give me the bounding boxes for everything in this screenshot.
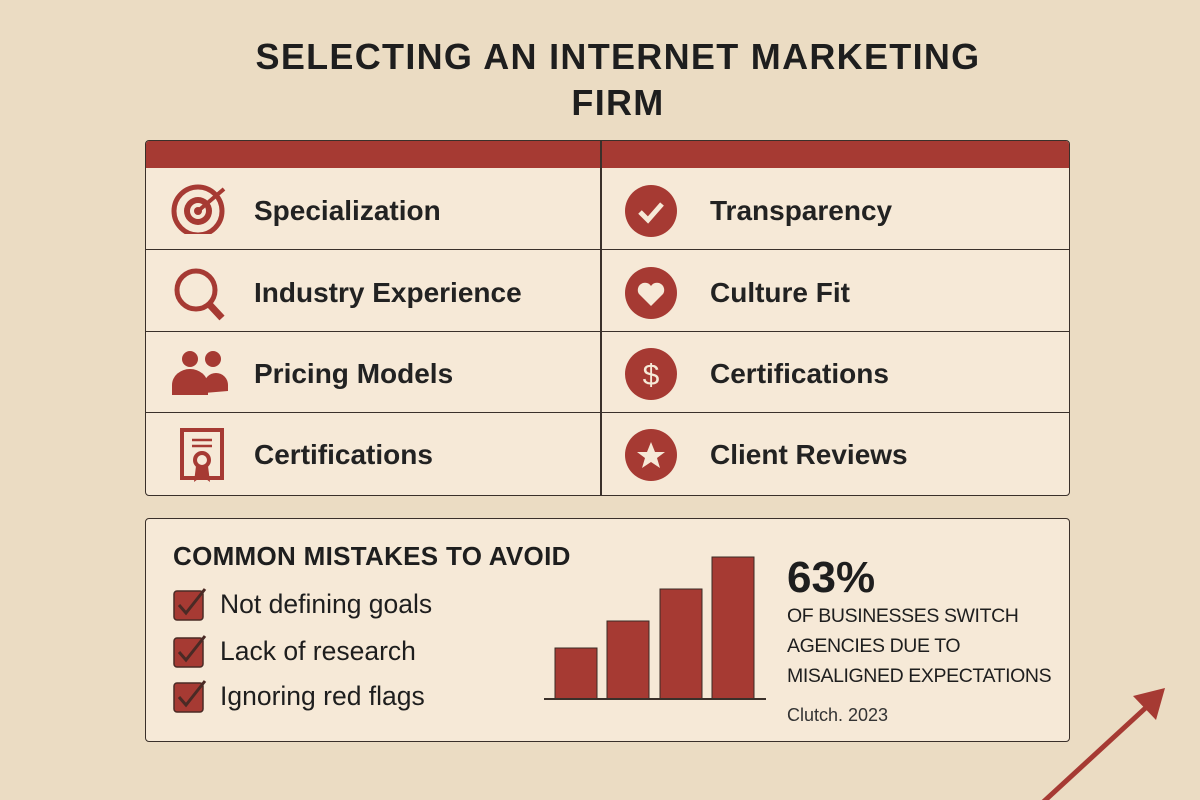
cell: Certifications (dollar) bbox=[602, 331, 1069, 413]
panel: common mistakes and stat: Lack of research bbox=[220, 636, 416, 666]
title: FIRM bbox=[571, 82, 665, 123]
stat description: OF BUSINESSES SWITCH bbox=[787, 605, 1018, 627]
item: Ignoring red flags bbox=[173, 680, 425, 713]
cell: Industry Experience bbox=[146, 250, 601, 332]
bar chart bbox=[544, 556, 766, 700]
cell: Specialization bbox=[146, 168, 601, 250]
cell: Certifications: Certifications bbox=[254, 439, 433, 470]
cell: Culture Fit bbox=[602, 250, 1069, 332]
title: SELECTING AN INTERNET MARKETING bbox=[256, 36, 980, 77]
cell: Certifications bbox=[180, 428, 433, 482]
cell: Certifications (dollar): $ bbox=[643, 359, 660, 392]
cell: Specialization: Specialization bbox=[254, 195, 441, 226]
heading: common mistakes: COMMON MISTAKES TO AVOID bbox=[173, 541, 571, 571]
title bbox=[256, 36, 980, 123]
stat description bbox=[787, 605, 1051, 687]
cell: Culture Fit: Culture Fit bbox=[710, 277, 850, 308]
cell: Client Reviews bbox=[625, 429, 908, 481]
stat description: MISALIGNED EXPECTATIONS bbox=[787, 665, 1051, 687]
item: Not defining goals bbox=[173, 588, 432, 621]
cell: Industry Experience: Industry Experience bbox=[254, 277, 522, 308]
arrow bbox=[1042, 688, 1165, 800]
cell: Certifications (dollar): Certifications bbox=[710, 358, 889, 389]
cell: Transparency bbox=[602, 168, 1069, 250]
cell: Client Reviews: Client Reviews bbox=[710, 439, 908, 470]
panel: common mistakes and stat: Ignoring red flags bbox=[220, 681, 425, 711]
panel: common mistakes and stat bbox=[145, 518, 1070, 742]
stat description: AGENCIES DUE TO bbox=[787, 635, 960, 657]
panel: factors table bbox=[145, 140, 1070, 496]
cell: Pricing Models bbox=[146, 331, 601, 413]
source: Clutch. 2023 bbox=[787, 705, 888, 725]
panel: common mistakes and stat: Not defining goals bbox=[220, 589, 432, 619]
cell: Transparency: Transparency bbox=[710, 195, 892, 226]
item: Lack of research bbox=[173, 635, 416, 668]
stat: 63%: 63% bbox=[787, 553, 875, 602]
cell: Pricing Models: Pricing Models bbox=[254, 358, 453, 389]
